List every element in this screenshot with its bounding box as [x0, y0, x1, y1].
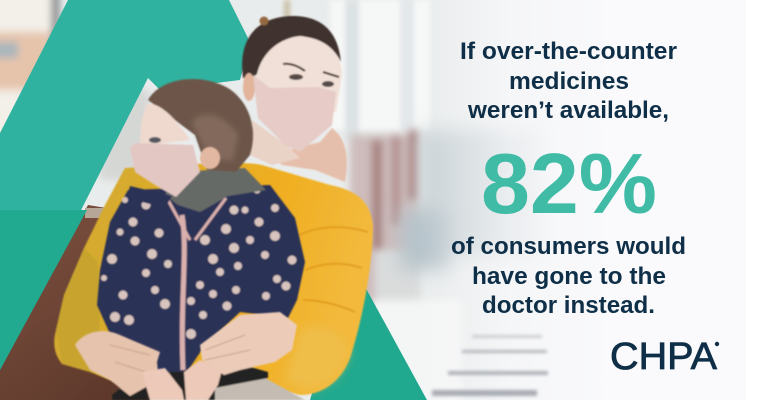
woman mask [253, 75, 336, 152]
child ear [200, 147, 220, 169]
supporting text: have gone to the [472, 263, 666, 290]
supporting text: doctor instead. [482, 292, 655, 319]
hair [242, 16, 341, 78]
hair bun [260, 16, 268, 26]
CHPA logo: CHPA [610, 336, 718, 378]
headline text [460, 38, 677, 124]
headline text: If over-the-counter [460, 38, 677, 65]
child hair [148, 79, 253, 172]
scarf [165, 168, 266, 212]
neck [250, 120, 300, 165]
face [255, 34, 342, 112]
jacket right sleeve highlight [285, 327, 348, 388]
woman's right hand [200, 312, 297, 375]
woman [54, 16, 373, 395]
child [97, 79, 305, 378]
headline text: weren’t available, [467, 97, 669, 124]
navy polka-dot jacket [97, 185, 305, 378]
child face [140, 104, 190, 146]
statistic 82%: 82% [481, 137, 657, 232]
headline text: medicines [509, 68, 629, 95]
green triangular graphic [0, 0, 427, 400]
ear [243, 73, 255, 101]
hands and pants [75, 312, 305, 400]
pink hoodie [268, 128, 347, 182]
polka dots [101, 186, 296, 339]
child eye [149, 137, 161, 143]
child's hands [142, 368, 184, 400]
hair highlight [192, 115, 238, 160]
woman's left hand [75, 331, 160, 396]
jacket left sleeve shading [56, 248, 100, 372]
supporting text [451, 233, 686, 319]
child mask [130, 143, 200, 197]
yellow puffer jacket [54, 163, 373, 395]
jacket folds [300, 227, 368, 312]
seat rail [85, 208, 115, 218]
wooden seat [0, 205, 150, 400]
eyes [283, 64, 339, 87]
supporting text: of consumers would [451, 233, 686, 260]
collar [127, 186, 172, 208]
